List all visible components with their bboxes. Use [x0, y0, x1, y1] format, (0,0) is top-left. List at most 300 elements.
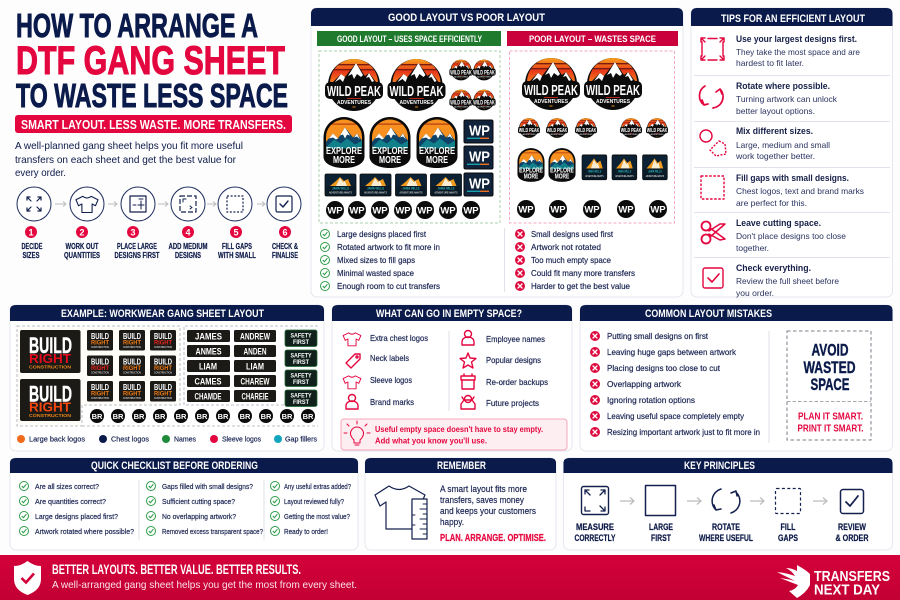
- BR gap filler badges: BR: [197, 412, 208, 421]
- mistakes list: Leaving useful space completely empty: [607, 412, 745, 421]
- WP round badges: WP: [550, 204, 566, 216]
- good layout list: Rotated artwork to fit more in: [337, 243, 440, 252]
- avoid wasted space box: [787, 331, 871, 440]
- WP round badges: WP: [518, 204, 534, 216]
- poor layout list: Harder to get the best value: [531, 282, 630, 291]
- legend: Names: [174, 434, 196, 444]
- tip: check everything: you order.: [736, 288, 774, 298]
- small wild peak badges: ADVENTURES: [477, 106, 491, 109]
- explore more badges: MORE: [333, 154, 355, 166]
- BR gap filler badges: BR: [155, 412, 166, 421]
- WP round badges: WP: [327, 206, 343, 216]
- tip: fill gaps: [701, 173, 864, 208]
- good layout list: Large designs placed first: [337, 230, 427, 239]
- explore more badges: EXPLORE: [326, 145, 362, 157]
- adventure banners: JAMA WILLS: [367, 186, 384, 190]
- chest logos: CONSTRUCTION: [123, 372, 141, 374]
- large back logos: [20, 330, 80, 421]
- small wild peak badges: WILD PEAK: [473, 70, 495, 76]
- BR gap filler badges: [90, 409, 315, 423]
- large wild peak badges: [325, 59, 446, 111]
- step 1: decide sizes: [17, 187, 51, 260]
- large wild peak badges: WILD PEAK: [390, 83, 444, 100]
- chest logos: BUILD: [154, 331, 172, 341]
- good layout banner: [317, 31, 501, 46]
- WP round badges: WP: [618, 204, 634, 216]
- WP round badges: [326, 201, 480, 219]
- adventure square badges: JAMA WILLS: [588, 169, 602, 174]
- arrow: [257, 202, 265, 206]
- chest logos: BUILD: [91, 356, 109, 366]
- good layout list: [320, 230, 440, 291]
- title: TO WASTE LESS SPACE: [16, 77, 288, 114]
- panel: good layout vs poor layout: [311, 8, 683, 297]
- right item list: Employee names: [486, 335, 545, 344]
- WP round badges: WP: [650, 204, 666, 216]
- tip: mix sizes: [700, 126, 830, 161]
- name plates: LIAM: [199, 362, 217, 372]
- WP round badges: WP: [463, 206, 479, 216]
- legend: Sleeve logos: [222, 434, 261, 444]
- tagline banner: SMART LAYOUT. LESS WASTE. MORE TRANSFERS.: [21, 118, 286, 132]
- mistakes list: Leaving huge gaps between artwork: [607, 348, 737, 357]
- step 3: place large designs first: DESIGNS FIRST: [114, 250, 160, 260]
- chest logos: CONSTRUCTION: [91, 397, 109, 400]
- panel: remember: [365, 458, 556, 550]
- chest logos: CONSTRUCTION: [154, 397, 172, 400]
- step 3: place large designs first: [114, 187, 160, 260]
- step 5: fill gaps with small: [218, 187, 256, 260]
- principle: rotate where useful: WHERE USEFUL: [699, 533, 753, 543]
- avoid wasted space box: SPACE: [810, 376, 850, 394]
- tip: cutting space: together.: [736, 243, 769, 253]
- safety first sleeve logos: FIRST: [293, 339, 309, 346]
- step 2: work out quantities: WORK OUT: [66, 241, 99, 251]
- step 5: fill gaps with small: FILL GAPS: [222, 241, 252, 251]
- checklist column 3: Getting the most value?: [284, 512, 350, 521]
- panel: quick checklist: [10, 458, 358, 550]
- WP round badges: WP: [584, 204, 600, 216]
- small wild peak badges: [518, 118, 668, 138]
- arrow: [813, 498, 827, 504]
- chest logos: RIGHT: [91, 365, 109, 372]
- remember text: transfers, saves money: [440, 495, 525, 505]
- tip: rotate: better layout options.: [736, 106, 815, 116]
- chest logos: [87, 330, 176, 402]
- tip: cutting space: Leave cutting space.: [736, 218, 821, 228]
- WP square badges: WP: [469, 148, 490, 166]
- remember text: [440, 484, 546, 544]
- tip: mix sizes: Mix different sizes.: [736, 126, 813, 136]
- mistakes list: Ignoring rotation options: [607, 396, 695, 405]
- checklist column 2: No overlapping artwork?: [162, 512, 236, 521]
- arrow: [158, 202, 168, 206]
- title: DTF GANG SHEET: [16, 39, 285, 83]
- icon: light bulb: [344, 421, 370, 445]
- tip: cutting space: Don't place designs too close: [736, 231, 846, 241]
- explore more badges: EXPLORE: [419, 145, 455, 157]
- tip: mix sizes: work together better.: [735, 151, 815, 161]
- good layout list: Minimal wasted space: [337, 269, 414, 278]
- principle: fill gaps: FILL: [780, 522, 796, 532]
- adventure banners: JAMA WILLS: [332, 186, 349, 190]
- principle: review and order: [836, 490, 869, 543]
- BR gap filler badges: BR: [176, 412, 187, 421]
- name plates: CHAMDE: [194, 392, 222, 402]
- name plates: [187, 330, 276, 402]
- safety first sleeve logos: FIRST: [293, 359, 309, 366]
- legend: Chest logos: [111, 434, 149, 444]
- small wild peak badges: ADVENTURES: [454, 76, 468, 79]
- BR gap filler badges: BR: [134, 412, 145, 421]
- large back logos: BUILD: [29, 333, 72, 358]
- chest logos: RIGHT: [154, 340, 172, 346]
- name plates: ANDEN: [244, 346, 267, 358]
- step 4: add medium designs: [168, 187, 208, 260]
- callout: Useful empty space doesn't have to stay empty.: [375, 424, 543, 434]
- legend: Gap fillers: [285, 434, 317, 444]
- small wild peak badges: WILD PEAK: [450, 70, 472, 76]
- heading: QUICK CHECKLIST BEFORE ORDERING: [91, 460, 258, 472]
- poor layout sheet: [510, 51, 674, 223]
- explore more badges: MORE: [426, 154, 448, 166]
- remember text: and keeps your customers: [440, 506, 537, 516]
- right item list: Future projects: [486, 399, 539, 408]
- principle: rotate where useful: [699, 489, 753, 543]
- panel: key principles: [564, 458, 892, 550]
- left item list: Extra chest logos: [370, 334, 428, 343]
- process steps: [17, 187, 301, 260]
- small wild peak badges: WILD PEAK: [473, 100, 495, 106]
- explore more badges: MORE: [524, 174, 539, 181]
- BR gap filler badges: BR: [261, 412, 272, 421]
- chest logos: RIGHT: [91, 390, 109, 398]
- tip: mix sizes: Large, medium and small: [736, 140, 830, 150]
- large wild peak badges: ADVENTURES: [534, 99, 569, 105]
- adventure banners: [325, 174, 462, 196]
- adventure banners: ADVENTURE AWAITS: [400, 190, 423, 194]
- step 2: work out quantities: [64, 187, 104, 260]
- explore more badges: MORE: [555, 174, 570, 181]
- mistakes list: Resizing important artwork just to fit more in: [607, 428, 760, 437]
- adventure banners: JAMA WILLS: [438, 186, 455, 190]
- checklist column 1: Are quantities correct?: [35, 497, 106, 506]
- checklist column 3: Any useful extras added?: [284, 482, 351, 491]
- small wild peak badges: WILD PEAK: [519, 128, 540, 134]
- principle: measure correctly: CORRECTLY: [574, 533, 616, 543]
- checklist column 1: Large designs placed first?: [35, 512, 118, 521]
- BR gap filler badges: BR: [282, 412, 293, 421]
- remember text: PLAN. ARRANGE. OPTIMISE.: [440, 533, 546, 544]
- tip: rotate: Turning artwork can unlock: [736, 94, 838, 104]
- name plates: ANDREW: [240, 332, 270, 342]
- logo: transfers next day: NEXT DAY: [814, 582, 880, 598]
- checklist column 2: Removed excess transparent space?: [162, 527, 263, 536]
- chest logos: BUILD: [123, 331, 141, 341]
- checklist column 1: Are all sizes correct?: [35, 482, 99, 491]
- panel: what can go in empty space: [332, 305, 572, 451]
- left item list: Sleeve logos: [370, 376, 412, 385]
- explore more badges: EXPLORE: [550, 168, 574, 175]
- adventure square badges: ADVENTURE AWAITS: [585, 175, 604, 178]
- large wild peak badges: ADVENTURES: [400, 100, 434, 106]
- poor layout banner: POOR LAYOUT – WASTES SPACE: [529, 34, 656, 45]
- adventure banners: ADVENTURE AWAITS: [364, 190, 387, 194]
- checklist column 2: Sufficient cutting space?: [162, 497, 235, 506]
- principle: review and order: REVIEW: [838, 522, 866, 532]
- WP square badges: [464, 120, 493, 196]
- step 1: decide sizes: 1: [28, 228, 34, 238]
- checklist column 2: Gaps filled with small designs?: [162, 482, 253, 491]
- name plates: CHAREW: [240, 376, 270, 388]
- tip: fill gaps: are perfect for this.: [736, 198, 807, 208]
- poor layout list: Small designs used first: [531, 230, 614, 239]
- WP square badges: WP: [469, 122, 490, 140]
- chest logos: CONSTRUCTION: [123, 397, 141, 400]
- chest logos: CONSTRUCTION: [154, 346, 172, 349]
- safety first sleeve logos: SAFETY: [290, 352, 312, 360]
- tip: largest first: hardest to fit later.: [736, 58, 804, 68]
- step 2: work out quantities: QUANTITIES: [64, 250, 100, 260]
- safety first sleeve logos: SAFETY: [290, 372, 312, 380]
- tip: check everything: [703, 263, 839, 298]
- small wild peak badges: ADVENTURES: [454, 106, 468, 109]
- WP round badges: WP: [417, 206, 433, 216]
- tip: largest first: Use your largest designs first.: [736, 34, 857, 44]
- tip: rotate: [699, 81, 838, 116]
- name plates: JAMES: [195, 332, 222, 342]
- WP round badges: WP: [349, 206, 365, 216]
- small wild peak badges: ADVENTURES: [523, 133, 536, 136]
- footer text: BETTER LAYOUTS. BETTER VALUE. BETTER RESULTS.: [52, 561, 301, 577]
- step 6: check and finalise: CHECK &: [272, 241, 298, 251]
- chest logos: RIGHT: [123, 390, 141, 398]
- small wild peak badges: WILD PEAK: [547, 128, 568, 134]
- intro paragraph: A well-planned gang sheet helps you fit more useful: [15, 141, 243, 152]
- principle: measure correctly: [574, 486, 616, 543]
- principle: large first: FIRST: [651, 533, 671, 543]
- principle: rotate where useful: ROTATE: [712, 522, 740, 532]
- poor layout list: [515, 229, 635, 291]
- WP round badges: WP: [440, 206, 456, 216]
- adventure square badges: ADVENTURE AWAITS: [615, 175, 634, 178]
- chest logos: BUILD: [154, 356, 172, 366]
- explore more badges: EXPLORE: [519, 168, 543, 175]
- chest logos: BUILD: [91, 331, 109, 341]
- small wild peak badges: ADVENTURES: [625, 133, 638, 136]
- arrow: [687, 498, 701, 504]
- tip: largest first: They take the most space and are: [736, 47, 860, 57]
- tagline banner: [15, 115, 292, 133]
- small wild peak badges: WILD PEAK: [647, 128, 668, 134]
- step 4: add medium designs: 4: [185, 228, 191, 238]
- logo: transfers next day: TRANSFERS: [814, 569, 890, 585]
- tip: check everything: Check everything.: [736, 263, 811, 273]
- panel: common layout mistakes: [580, 305, 892, 451]
- adventure banners: ADVENTURE AWAITS: [434, 190, 458, 194]
- tip: fill gaps: Fill gaps with small designs.: [736, 173, 849, 183]
- small wild peak badges: ADVENTURES: [651, 133, 664, 136]
- mistakes list: Overlapping artwork: [607, 380, 682, 389]
- adventure square badges: ADVENTURE AWAITS: [646, 175, 664, 178]
- remember text: A smart layout fits more: [440, 484, 527, 494]
- adventure banners: JAMA WILLS: [402, 186, 420, 190]
- footer band: [0, 555, 900, 600]
- WP round badges: [517, 200, 667, 218]
- checklist column 3: [270, 482, 351, 536]
- tip: check everything: Review the full sheet before: [736, 276, 839, 286]
- avoid wasted space box: PRINT IT SMART.: [798, 422, 864, 434]
- logo: transfers next day: [777, 565, 890, 598]
- step 3: place large designs first: PLACE LARGE: [117, 241, 157, 251]
- avoid wasted space box: AVOID: [812, 342, 849, 360]
- principle: fill gaps: [776, 488, 800, 543]
- large wild peak badges: WILD PEAK: [327, 83, 381, 100]
- small wild peak badges: WILD PEAK: [576, 128, 597, 134]
- large back logos: CONSTRUCTION: [29, 364, 71, 370]
- step 5: fill gaps with small: WITH SMALL: [218, 250, 256, 260]
- arrow: [207, 202, 216, 206]
- chest logos: RIGHT: [154, 390, 172, 398]
- safety first sleeve logos: [285, 330, 317, 406]
- chest logos: CONSTRUCTION: [91, 372, 109, 374]
- heading: GOOD LAYOUT VS POOR LAYOUT: [388, 12, 545, 24]
- legend: [17, 434, 317, 444]
- name plates: CHAREIE: [242, 392, 268, 402]
- heading: COMMON LAYOUT MISTAKES: [645, 308, 772, 320]
- icon: t-shirt and ruler: [375, 486, 427, 539]
- step 4: add medium designs: ADD MEDIUM: [168, 241, 208, 251]
- large wild peak badges: WILD PEAK: [524, 82, 578, 99]
- left item list: [343, 333, 428, 409]
- tip: rotate: Rotate where possible.: [736, 81, 830, 91]
- principle: fill gaps: GAPS: [778, 533, 798, 543]
- title: HOW TO ARRANGE A: [16, 7, 258, 44]
- adventure square badges: JAMA WILLS: [618, 169, 632, 174]
- heading: TIPS FOR AN EFFICIENT LAYOUT: [721, 13, 865, 25]
- chest logos: CONSTRUCTION: [154, 372, 172, 374]
- checklist column 1: [20, 482, 134, 536]
- small wild peak badges: ADVENTURES: [580, 133, 593, 136]
- explore more badges: [322, 117, 459, 168]
- name plates: LIAM: [246, 362, 264, 372]
- good layout list: Enough room to cut transfers: [337, 282, 440, 291]
- right item list: [460, 330, 548, 409]
- WP round badges: WP: [395, 206, 411, 216]
- intro paragraph: transfers on each sheet and get the best value for: [15, 155, 237, 166]
- intro paragraph: [15, 141, 243, 179]
- chest logos: RIGHT: [154, 365, 172, 372]
- principle: large first: [646, 486, 676, 543]
- footer text: A well-arranged gang sheet helps you get the most from every sheet.: [52, 579, 357, 591]
- avoid wasted space box: PLAN IT SMART.: [798, 410, 863, 422]
- small wild peak badges: WILD PEAK: [621, 128, 642, 134]
- poor layout list: Artwork not rotated: [531, 243, 601, 252]
- step 2: work out quantities: 2: [79, 228, 85, 238]
- intro paragraph: every order.: [15, 168, 66, 179]
- safety first sleeve logos: SAFETY: [290, 332, 312, 340]
- step 4: add medium designs: DESIGNS: [175, 250, 201, 260]
- large back logos: BUILD: [29, 382, 72, 406]
- chest logos: CONSTRUCTION: [91, 346, 109, 349]
- panel: workwear gang sheet example: [10, 305, 324, 451]
- poor layout banner: [507, 31, 678, 46]
- explore more badges: EXPLORE: [372, 145, 408, 157]
- BR gap filler badges: BR: [218, 412, 229, 421]
- right item list: Re-order backups: [486, 378, 548, 387]
- checklist column 2: [146, 482, 263, 536]
- chest logos: RIGHT: [123, 340, 141, 346]
- step 6: check and finalise: FINALISE: [272, 250, 298, 260]
- adventure banners: ADVENTURE AWAITS: [329, 190, 352, 194]
- callout: [341, 419, 567, 450]
- heading: KEY PRINCIPLES: [684, 460, 755, 472]
- principle: large first: LARGE: [649, 522, 673, 532]
- chest logos: RIGHT: [123, 365, 141, 372]
- principle: review and order: & ORDER: [836, 533, 869, 543]
- good layout sheet: [319, 51, 500, 223]
- explore more badges: MORE: [379, 154, 401, 166]
- heading: EXAMPLE: WORKWEAR GANG SHEET LAYOUT: [61, 308, 264, 320]
- chest logos: CONSTRUCTION: [123, 346, 141, 349]
- name plates: CAMES: [194, 376, 222, 388]
- arrow: [55, 202, 66, 206]
- safety first sleeve logos: FIRST: [293, 379, 309, 386]
- BR gap filler badges: BR: [303, 412, 314, 421]
- poor layout list: Could fit many more transfers: [531, 269, 635, 278]
- step 1: decide sizes: DECIDE: [22, 241, 43, 251]
- step 3: place large designs first: 3: [130, 228, 136, 238]
- checklist column 1: Artwork rotated where possible?: [35, 527, 134, 536]
- mistakes list: [590, 331, 760, 437]
- step 1: decide sizes: SIZES: [22, 250, 40, 260]
- footer text: [52, 561, 357, 591]
- large back logos: CONSTRUCTION: [29, 413, 71, 418]
- explore more badges: [516, 148, 577, 182]
- checklist column 3: Layout reviewed fully?: [284, 497, 344, 506]
- small wild peak badges: WILD PEAK: [450, 100, 472, 106]
- checklist column 3: Ready to order!: [284, 527, 328, 536]
- poor layout list: Too much empty space: [531, 256, 611, 265]
- tip: fill gaps: Chest logos, text and brand marks: [736, 186, 864, 196]
- icon: shield: [14, 561, 41, 595]
- tip: largest first: [701, 34, 860, 68]
- mistakes list: Putting small designs on first: [607, 332, 709, 341]
- adventure square badges: [582, 155, 667, 180]
- mistakes list: Placing designs too close to cut: [607, 364, 721, 373]
- legend: Large back logos: [29, 434, 85, 444]
- good layout list: Mixed sizes to fill gaps: [337, 256, 415, 265]
- BR gap filler badges: BR: [92, 412, 103, 421]
- safety first sleeve logos: FIRST: [293, 399, 309, 406]
- arrow: [108, 202, 117, 206]
- right item list: Popular designs: [486, 356, 541, 365]
- chest logos: BUILD: [91, 382, 109, 392]
- large wild peak badges: ADVENTURES: [337, 100, 372, 106]
- callout: Add what you know you'll use.: [375, 436, 487, 446]
- large wild peak badges: ADVENTURES: [596, 99, 631, 105]
- heading: WHAT CAN GO IN EMPTY SPACE?: [376, 308, 522, 320]
- panel: tips for an efficient layout: [691, 8, 892, 298]
- step 6: check and finalise: [267, 187, 301, 260]
- BR gap filler badges: BR: [240, 412, 251, 421]
- good layout banner: GOOD LAYOUT – USES SPACE EFFICIENTLY: [337, 34, 482, 45]
- small wild peak badges: ADVENTURES: [551, 133, 564, 136]
- step 6: check and finalise: 6: [282, 228, 288, 238]
- small wild peak badges: [449, 60, 496, 110]
- chest logos: BUILD: [123, 382, 141, 392]
- chest logos: BUILD: [123, 356, 141, 366]
